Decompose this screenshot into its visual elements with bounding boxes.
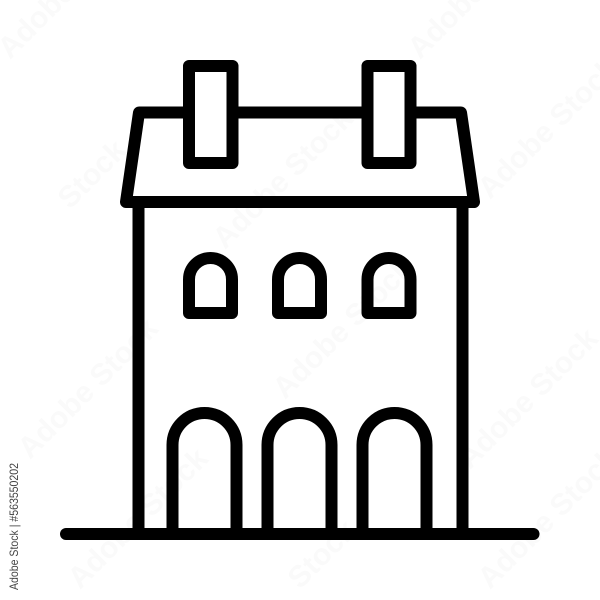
stock image id caption: Adobe Stock | #563550202 xyxy=(7,463,21,590)
door arch: middle xyxy=(268,413,332,534)
faint watermark pattern: Stock xyxy=(282,514,363,595)
building outline xyxy=(66,66,534,534)
right wall xyxy=(456,202,468,534)
faint watermark pattern: Adobe Stock xyxy=(12,312,165,465)
window: right xyxy=(368,258,410,313)
faint watermark pattern: Adobe Stock xyxy=(207,102,360,255)
left wall xyxy=(132,202,144,534)
window: middle xyxy=(278,258,321,313)
roof xyxy=(126,112,474,202)
door arch: left xyxy=(172,413,236,534)
faint watermark pattern: Adobe Stock xyxy=(267,252,420,405)
window: left xyxy=(189,258,232,313)
ground line xyxy=(66,528,534,540)
chimney: right xyxy=(368,66,410,163)
faint watermark pattern: Stock xyxy=(52,134,133,215)
chimney: left xyxy=(189,66,232,163)
faint watermark pattern: Adobe Stock xyxy=(62,442,215,595)
door arch: right xyxy=(362,413,426,534)
